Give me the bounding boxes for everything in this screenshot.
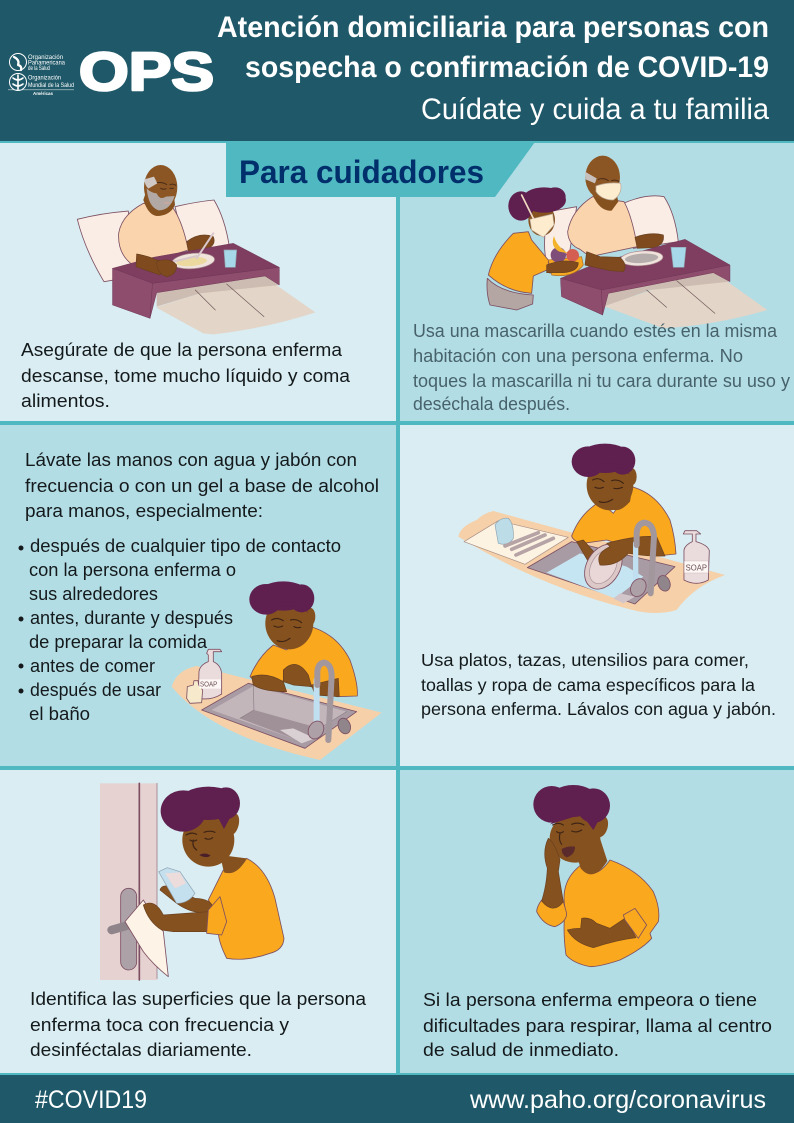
title: Atención domiciliaria para personas con [217,11,769,44]
list: when to wash hands: antes, durante y después [30,607,233,628]
illustration: boy washing dishes [458,444,725,613]
logo: OPS: Organización [28,55,63,61]
list: when to wash hands: de preparar la comida [29,631,208,652]
text: call: Si la persona enferma empeora o tiene [423,989,757,1010]
text: hand washing intro: para manos, especialmente: [25,500,263,521]
logo: OPS [8,42,214,102]
text: rest [21,339,351,411]
text: hand washing intro: Lávate las manos con agua y jabón con [25,449,357,470]
illustration: boy disinfecting door handle [100,783,284,980]
text: surfaces: desinféctalas diariamente. [30,1039,252,1060]
title: sospecha o confirmación de COVID-19 [245,51,769,84]
text: mask [413,320,791,414]
header band [0,0,794,141]
list: when to wash hands: después de usar [30,679,161,700]
panel: rest and eat [0,143,396,421]
text: rest: Asegúrate de que la persona enferma [21,339,343,360]
list: when to wash hands: después de cualquier tipo de contacto [30,535,341,556]
text: surfaces [30,988,367,1060]
list: when to wash hands: antes de comer [30,655,155,676]
icon: soap bottle [683,531,709,583]
list: when to wash hands: el baño [29,703,90,724]
panel: mask [400,143,794,421]
list: when to wash hands: con la persona enferma o [29,559,236,580]
illustration: caregiver with mask serving food [487,156,767,328]
text: hand washing intro [25,449,379,521]
logo: OPS: Organización [28,76,61,82]
panel: hand washing [0,425,396,766]
website: www.paho.org/coronavirus [469,1086,766,1114]
logo: OPS: OPS [79,42,214,102]
panel: disinfect surfaces [0,770,396,1073]
title: Cuídate y cuida a tu familia [421,93,769,126]
text: call: dificultades para respirar, llama al centro [423,1015,772,1036]
logo: OPS: Mundial de la Salud [28,83,74,89]
illustration: man eating in bed [77,165,315,334]
panel: call health centre [400,770,794,1073]
banner: para cuidadores [226,142,535,197]
list: when to wash hands: sus alrededores [29,583,158,604]
icon: soap bottle: SOAP [200,680,217,689]
text: call: de salud de inmediato. [423,1039,619,1060]
text: hand washing intro: frecuencia o con un gel a base de alcohol [25,475,379,496]
logo: OPS: Américas [33,91,53,96]
text: surfaces: enferma toca con frecuencia y [30,1014,290,1035]
text: dishes: Usa platos, tazas, utensilios para comer, [421,650,749,670]
logo: OPS: Panamericana [28,60,66,66]
text: surfaces: Identifica las superficies que la persona [30,988,367,1009]
text: mask: habitación con una persona enferma. No [413,345,743,366]
text: call [423,989,772,1060]
logo: OPS: de la Salud [28,66,50,72]
banner: para cuidadores: Para cuidadores [239,154,484,190]
text: rest: descanse, tome mucho líquido y coma [21,365,351,386]
panel: separate dishes [400,425,794,766]
text: dishes: toallas y ropa de cama específicos para la [421,675,755,695]
icon: soap bottle: SOAP [686,563,707,572]
text: mask: toques la mascarilla ni tu cara durante su uso y [413,370,791,391]
text: mask: deséchala después. [413,393,570,414]
footer band [0,1075,794,1123]
list: when to wash hands [18,535,341,724]
text: rest: alimentos. [21,390,110,411]
title [217,11,769,126]
illustration: sick person on the phone [533,785,659,967]
illustration: boy washing hands [172,581,382,760]
text: dishes [421,650,776,719]
icon: soap bottle [187,649,222,703]
text: dishes: persona enferma. Lávalos con agua y jabón. [421,699,776,719]
text: mask: Usa una mascarilla cuando estés en la misma [413,320,778,341]
hashtag: #COVID19 [35,1086,147,1114]
